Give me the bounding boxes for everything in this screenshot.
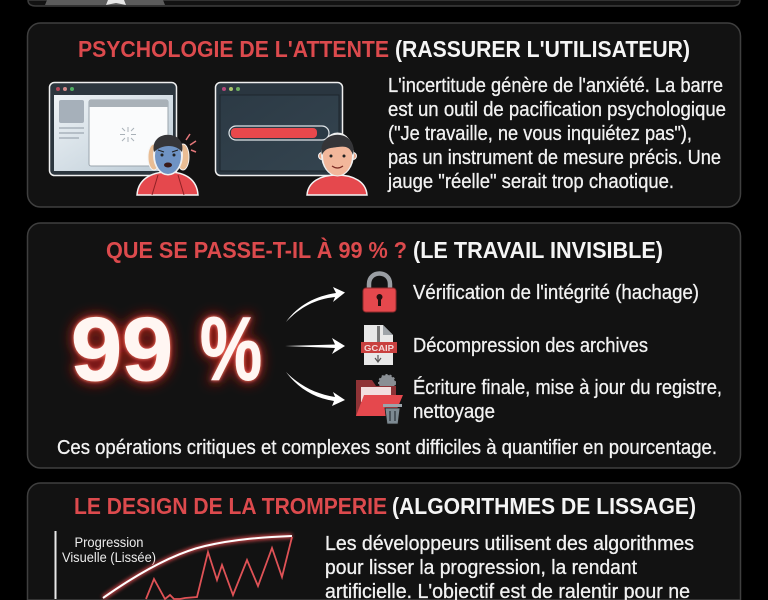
text block: developpeurs bbox=[325, 533, 694, 600]
panel: que se passe-t-il à 99 % bbox=[28, 223, 740, 468]
text: footnote: Ces opérations critiques et complexes sont difficiles à quantifier en pourcentage. bbox=[57, 437, 717, 459]
text: verification: Vérification de l'intégrité (hachage) bbox=[413, 282, 699, 304]
text block: incertitude: jauge "réelle" serait trop chaotique. bbox=[387, 171, 674, 193]
heading: psychologie: PSYCHOLOGIE DE L'ATTENTE bbox=[78, 36, 389, 62]
text: ecriture: Écriture finale, mise à jour du registre, bbox=[413, 376, 722, 399]
text block: developpeurs: pour lisser la progression, la rendant bbox=[325, 557, 637, 579]
panel: design de la tromperie bbox=[28, 483, 740, 600]
text block: incertitude: pas un instrument de mesure précis. Une bbox=[388, 147, 721, 169]
icon: worried person bbox=[137, 134, 198, 195]
big number: 99 %: % bbox=[200, 300, 262, 400]
icon: padlock bbox=[363, 274, 396, 312]
heading: que se passe-t-il: QUE SE PASSE-T-IL À 99 % ? bbox=[106, 236, 407, 263]
line: smoothed bbox=[103, 536, 292, 598]
label: visual progression: Visuelle (Lissée) bbox=[62, 549, 156, 565]
panel: psychologie de l'attente bbox=[28, 23, 740, 207]
big number: 99 % bbox=[71, 300, 262, 400]
heading: travail invisible: (LE TRAVAIL INVISIBLE) bbox=[413, 237, 663, 263]
progress bar bbox=[229, 126, 329, 140]
illustration: anxious user at blank window bbox=[50, 82, 198, 195]
arrow: to verification bbox=[286, 287, 345, 322]
illustration: reassured user with progress bar bbox=[216, 82, 367, 195]
text block: incertitude: est un outil de pacification psychologique bbox=[388, 99, 726, 121]
label: visual progression bbox=[62, 534, 156, 565]
arrow: to writing bbox=[286, 372, 345, 406]
text: decompression: Décompression des archives bbox=[413, 335, 648, 357]
line: real bbox=[146, 537, 292, 599]
big number: 99 %: 99 bbox=[71, 300, 173, 400]
big number: 99 %: % bbox=[200, 300, 262, 400]
icon: archive file: GCAIP bbox=[364, 343, 394, 353]
chart: smoothed vs real progress bbox=[56, 531, 292, 599]
text block: incertitude bbox=[387, 75, 726, 193]
text block: incertitude: L'incertitude génère de l'anxiété. La barre bbox=[388, 75, 723, 97]
text: ecriture: nettoyage bbox=[413, 401, 495, 423]
icon: folder, gear and trash bbox=[356, 375, 403, 424]
panel: previous section (cropped) bbox=[28, 0, 740, 6]
text block: developpeurs: Les développeurs utilisent des algorithmes bbox=[325, 533, 694, 555]
heading: algorithmes: (ALGORITHMES DE LISSAGE) bbox=[392, 493, 696, 519]
label: visual progression: Progression bbox=[74, 534, 144, 550]
icon: archive file bbox=[361, 325, 397, 365]
text block: incertitude: ("Je travaille, ne vous inquiétez pas"), bbox=[388, 123, 692, 145]
text: ecriture bbox=[413, 376, 722, 423]
big number: 99 %: 99 bbox=[71, 300, 173, 400]
icon: calm person bbox=[307, 132, 367, 195]
big number: 99 %: 99 bbox=[71, 300, 173, 400]
heading: rassurer: (RASSURER L'UTILISATEUR) bbox=[395, 36, 690, 62]
heading: design: LE DESIGN DE LA TROMPERIE bbox=[74, 493, 387, 519]
big number: 99 %: % bbox=[200, 300, 262, 400]
arrow: to decompression bbox=[285, 338, 345, 354]
